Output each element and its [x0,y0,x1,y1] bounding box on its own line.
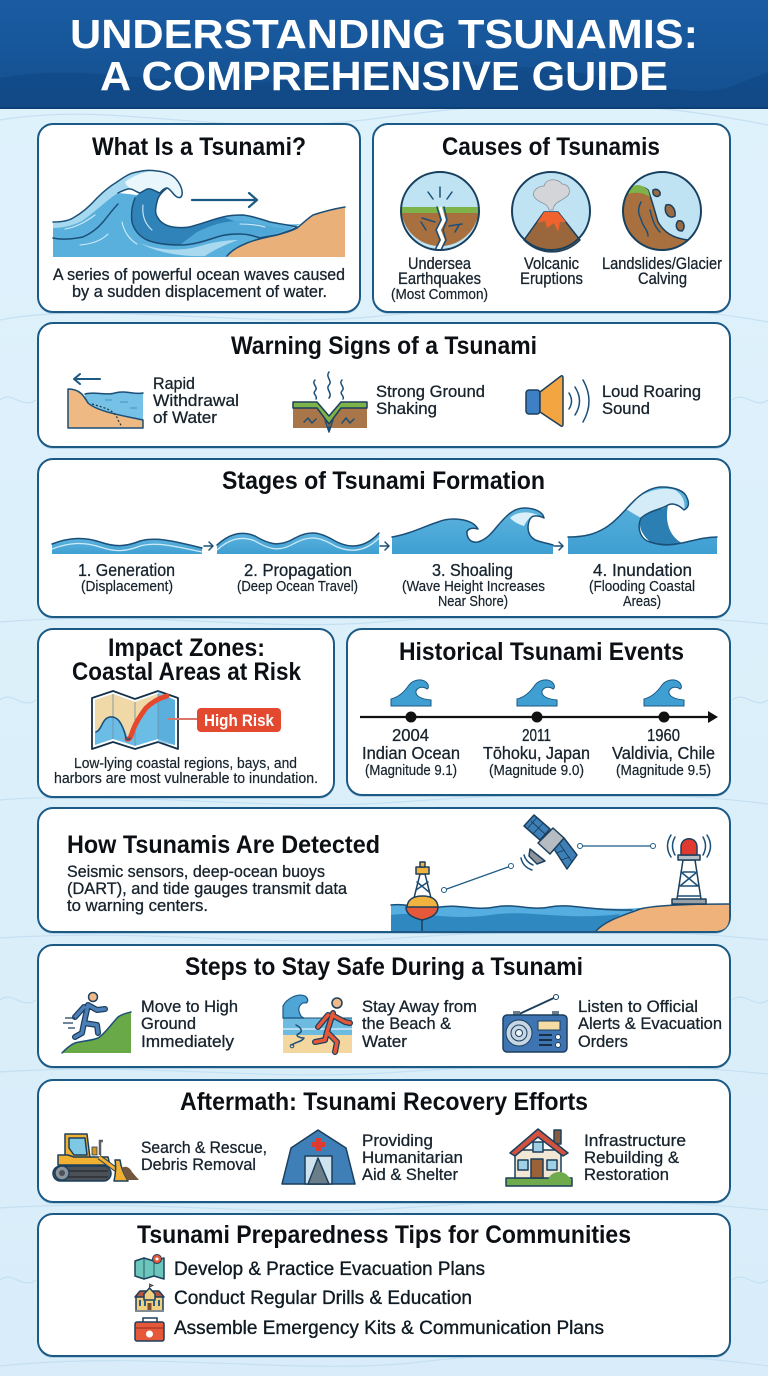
event: 1960 [612,725,715,779]
label: loud roaring sound [602,382,701,418]
title banner: UNDERSTANDING TSUNAMIS: [70,11,698,57]
icon: satellite [521,815,577,870]
illustration: breaking wave approaching shore [53,170,345,257]
label: propagation [237,560,358,595]
label: shoaling: Near Shore) [438,594,508,610]
label: inundation: 4. Inundation [593,560,692,580]
icon: running uphill [62,992,131,1053]
label: infrastructure: Rebuilding & [584,1148,680,1167]
icon: risk map [92,691,178,749]
description: detection: Seismic sensors, deep-ocean buoys [67,862,325,881]
tip: drills: Conduct Regular Drills & Education [174,1287,472,1309]
icon: fleeing the beach [283,995,352,1053]
stage 2 wave [217,533,379,554]
description: detection: to warning centers. [67,896,208,915]
tip: kits: Assemble Emergency Kits & Communication Plans [174,1317,604,1339]
event: 2011: Tōhoku, Japan [483,743,590,763]
label: humanitarian aid [362,1131,463,1184]
event: 2004: Indian Ocean [362,743,460,763]
label: infrastructure [584,1131,686,1184]
heading: historical events: Historical Tsunami Events [399,638,684,666]
description: vulnerable areas [54,756,318,787]
event: 2011 [483,725,590,779]
label: high ground: Immediately [141,1032,235,1051]
description text: by a sudden displacement of water. [72,282,327,301]
event: 2004: 2004 [392,725,429,745]
icon: aid tent [282,1130,355,1184]
label: undersea earthquakes: Undersea [408,254,471,273]
panel: aftermath [38,1080,730,1204]
panel: warning signs [38,323,730,449]
label: listen: Listen to Official [578,997,698,1016]
heading: aftermath: Aftermath: Tsunami Recovery Efforts [180,1088,588,1116]
event: 2011: (Magnitude 9.0) [489,763,584,779]
label: humanitarian aid: Humanitarian [362,1148,463,1167]
label: shoaling: 3. Shoaling [432,560,513,580]
label: loud roaring sound: Sound [602,399,650,418]
label: volcanic eruptions: Volcanic [524,254,579,273]
event: 1960: 1960 [647,725,680,745]
icon: undersea earthquake [401,172,479,250]
icon: bulldozer [53,1134,139,1181]
label: humanitarian aid: Aid & Shelter [362,1165,458,1184]
arrow 3 [554,542,563,550]
icon: landslide [623,172,701,250]
title banner: A COMPREHENSIVE GUIDE [100,53,668,99]
label: volcanic eruptions: Eruptions [520,269,583,288]
description: vulnerable areas: harbors are most vulnerable to inundation. [54,771,318,787]
label: propagation: (Deep Ocean Travel) [237,579,358,595]
label: humanitarian aid: Providing [362,1131,433,1150]
icon: evacuation map [135,1254,164,1279]
label: generation [78,560,175,595]
panel: stages of tsunami formation [38,459,730,619]
heading: warning signs: Warning Signs of a Tsunami [231,332,537,360]
tip: evacuation plans: Develop & Practice Evacuation Plans [174,1258,485,1280]
label: ground shaking: Strong Ground [376,382,485,401]
label: stay away: the Beach & [362,1014,452,1033]
heading: detection: How Tsunamis Are Detected [67,831,380,859]
panel: causes of tsunamis [373,124,730,314]
label: undersea earthquakes: Earthquakes [398,269,481,288]
event: 2011: 2011 [522,725,551,745]
description: vulnerable areas: Low-lying coastal regions, bays, and [74,756,297,772]
description text: A series of powerful ocean waves caused [53,265,345,284]
stage 3 wave [392,508,553,554]
label: rapid withdrawal [153,374,239,427]
label: high ground [141,997,238,1051]
icon: warning tower [668,835,710,904]
panel: stay safe [38,945,730,1069]
panel: impact zones [38,629,334,799]
event: 1960: (Magnitude 9.5) [616,763,711,779]
stage 4 wave [568,487,717,554]
label: inundation [589,560,695,610]
label: undersea earthquakes: (Most Common) [391,287,488,303]
icon: buoy [406,862,438,931]
heading: impact zones: Coastal Areas at Risk [72,658,301,686]
heading: stay safe: Steps to Stay Safe During a Tsunami [185,953,583,981]
illustration: ocean and shore [391,904,729,931]
label: shoaling [402,560,545,610]
icon: rapid withdrawal of water [68,374,143,428]
label: listen: Orders [578,1032,628,1051]
arrow 2 [380,542,389,550]
panel: what is a tsunami [38,124,360,314]
label: generation: 1. Generation [78,560,175,580]
icon: small wave 1960 [644,680,684,706]
label: search and rescue: Debris Removal [141,1155,256,1174]
icon: rebuilt house [506,1129,572,1186]
signal line: satellite to tower [578,844,656,848]
icon: radio [503,994,567,1052]
event: 2004 [362,725,460,779]
icon: small wave 2004 [391,680,431,706]
label: listen [578,997,722,1051]
icon: emergency kit [135,1318,164,1341]
label: infrastructure: Infrastructure [584,1131,686,1150]
description text [53,265,345,301]
arrow 1 [204,542,213,550]
label: generation: (Displacement) [81,579,173,595]
label: listen: Alerts & Evacuation [578,1014,722,1033]
timeline axis [360,711,718,723]
heading: impact zones [72,634,301,686]
event: 2004: (Magnitude 9.1) [365,763,457,779]
label: infrastructure: Restoration [584,1165,669,1184]
panel: preparedness tips [38,1214,730,1358]
icon: small wave 2011 [517,680,557,706]
label: shoaling: (Wave Height Increases [402,579,545,595]
label: propagation: 2. Propagation [244,560,352,580]
heading: what is a tsunami: What Is a Tsunami? [92,133,306,161]
label: ground shaking [376,382,485,418]
label: loud roaring sound: Loud Roaring [602,382,701,401]
label: landslides: Landslides/Glacier [602,254,722,273]
panel: detection [38,808,730,934]
label: inundation: Areas) [623,594,661,610]
label: high ground: Move to High [141,997,238,1016]
callout: high risk: High Risk [204,711,274,730]
label: rapid withdrawal: Withdrawal [153,391,239,410]
label: ground shaking: Shaking [376,399,437,418]
heading: stages: Stages of Tsunami Formation [222,467,545,495]
label: undersea earthquakes [391,254,488,303]
label: stay away: Water [362,1032,407,1051]
heading: causes: Causes of Tsunamis [442,133,660,161]
arrow: wave direction [192,193,257,207]
icon: school [135,1284,164,1312]
label: landslides: Calving [638,269,687,288]
icon: strong ground shaking [293,372,367,432]
heading: preparedness: Tsunami Preparedness Tips for Communities [137,1221,631,1249]
label: high ground: Ground [141,1014,196,1033]
label: volcanic eruptions [520,254,583,288]
signal line: buoy to satellite [442,864,514,892]
label: landslides [602,254,722,288]
title banner [0,0,768,109]
label: rapid withdrawal: of Water [153,408,217,427]
label: search and rescue: Search & Rescue, [141,1138,267,1157]
description: detection [67,862,348,915]
heading: impact zones: Impact Zones: [108,634,265,662]
icon: loud speaker [526,376,589,426]
label: inundation: (Flooding Coastal [589,579,695,595]
label: rapid withdrawal: Rapid [153,374,195,393]
panel: historical events [347,629,730,797]
event: 1960: Valdivia, Chile [612,743,715,763]
icon: volcanic eruption [512,172,590,252]
description: detection: (DART), and tide gauges transmit data [67,879,348,898]
stage 1 wave [52,538,202,554]
connector: map to label [168,718,198,720]
label: stay away [362,997,477,1051]
label: stay away: Stay Away from [362,997,477,1016]
label: search and rescue [141,1138,267,1174]
